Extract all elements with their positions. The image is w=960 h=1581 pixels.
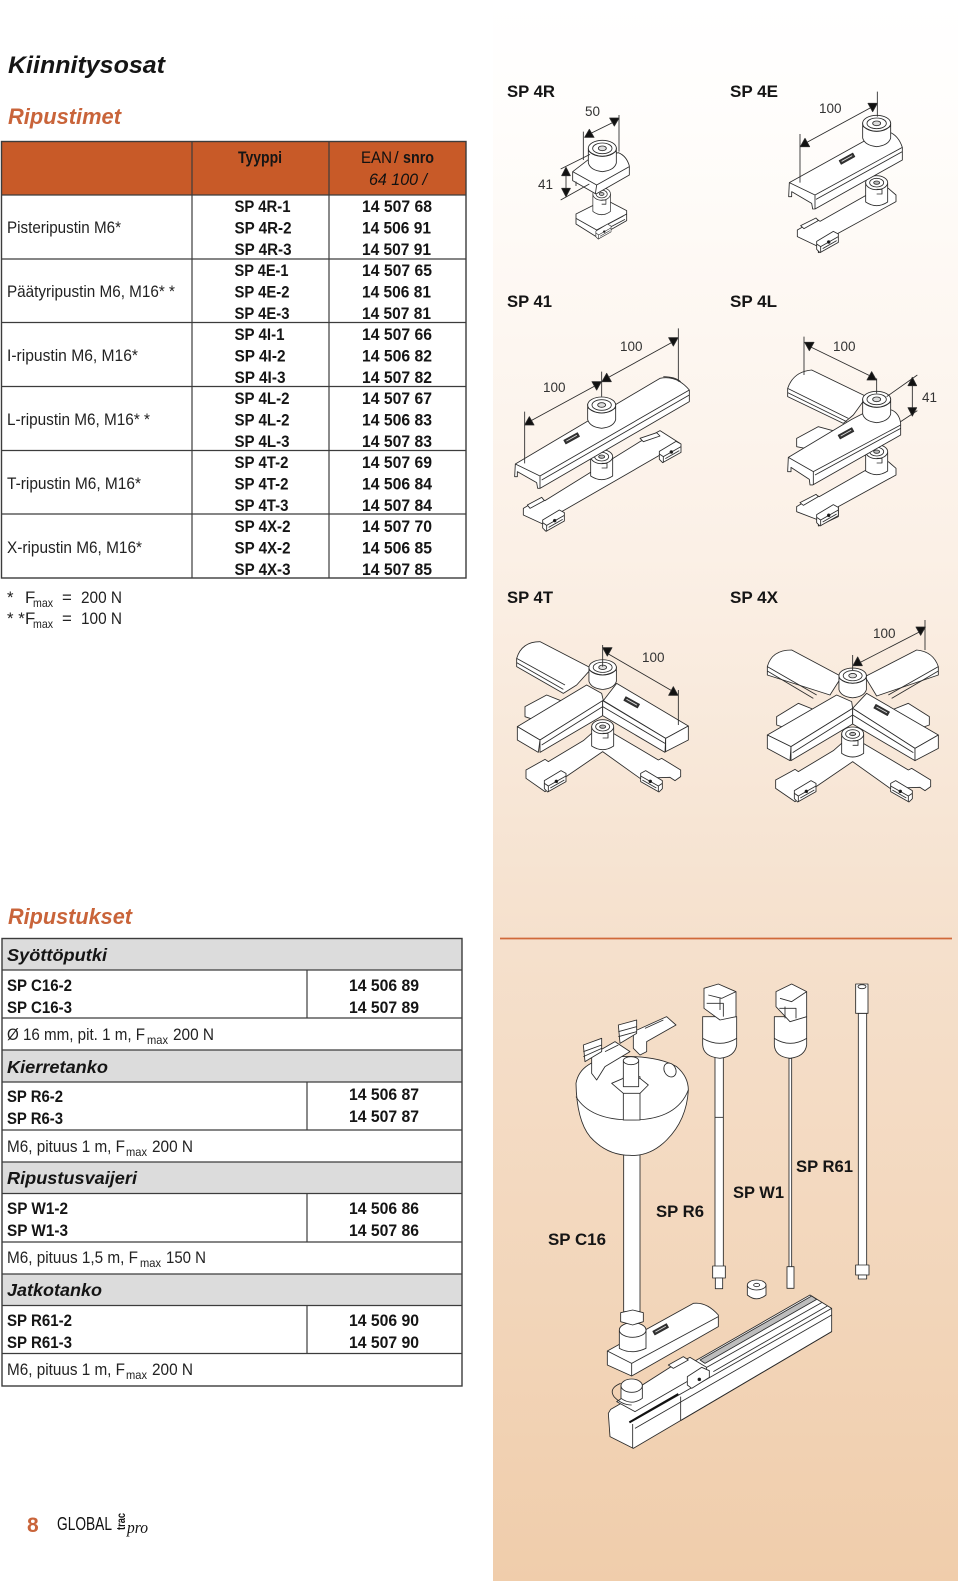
section: Kierretanko: SP R6-3 bbox=[7, 1109, 63, 1128]
row group: T-ripustin: SP 4T-3 bbox=[234, 496, 288, 515]
product labels and dimensions: hangers: 100 bbox=[833, 339, 856, 354]
table header: / bbox=[394, 148, 399, 167]
row group: I-ripustin: SP 4I-3 bbox=[234, 368, 286, 387]
footnotes: 200 N bbox=[81, 588, 122, 607]
product labels and dimensions: hangers: SP 4T bbox=[507, 589, 553, 607]
row group: I-ripustin: 14 507 66 bbox=[362, 325, 432, 344]
row group: Päätyripustin: 14 507 81 bbox=[362, 304, 431, 323]
section: Syöttöputki: 200 N bbox=[173, 1025, 214, 1044]
drawing: suspension parts bbox=[576, 984, 869, 1376]
section: Ripustusvaijeri: SP W1-3 bbox=[7, 1221, 68, 1240]
drawing: SP 4L bbox=[788, 337, 917, 526]
row group: I-ripustin: SP 4I-2 bbox=[234, 346, 286, 366]
section: Jatkotanko: 14 506 90 bbox=[349, 1311, 419, 1330]
footnotes: 100 N bbox=[81, 609, 122, 628]
product labels: suspension parts: SP W1 bbox=[733, 1184, 784, 1202]
product labels and dimensions: hangers: SP 4X bbox=[730, 589, 778, 607]
product labels and dimensions: hangers: 41 bbox=[538, 177, 553, 192]
product labels and dimensions: hangers: 100 bbox=[873, 626, 896, 641]
drawing: SP 4T bbox=[517, 642, 688, 792]
section: Syöttöputki bbox=[7, 945, 419, 1047]
row group: X-ripustin: 14 507 85 bbox=[362, 560, 432, 579]
section: Jatkotanko: M6, pituus 1 m, F bbox=[7, 1360, 125, 1379]
section: Jatkotanko: max bbox=[126, 1368, 147, 1382]
row group: Pisteripustin: SP 4R-1 bbox=[234, 197, 290, 216]
row group: L-ripustin: 14 506 83 bbox=[362, 410, 432, 430]
row group: Päätyripustin bbox=[7, 261, 432, 323]
footnotes: * bbox=[7, 588, 14, 607]
section: Kierretanko bbox=[7, 1057, 419, 1159]
footnotes: = bbox=[62, 609, 72, 628]
product labels and dimensions: hangers: SP 4L bbox=[730, 293, 777, 311]
part: SP R61 extension rod bbox=[856, 984, 869, 1279]
section: Syöttöputki: 14 507 89 bbox=[349, 998, 419, 1017]
product labels and dimensions: hangers: SP 41 bbox=[507, 293, 552, 311]
row group: Pisteripustin: Pisteripustin M6* bbox=[7, 218, 121, 237]
row group: I-ripustin bbox=[7, 325, 432, 387]
drawing: track profile with adapter bbox=[608, 1295, 832, 1448]
table header: Tyyppi bbox=[238, 148, 282, 167]
table header: EAN bbox=[361, 148, 392, 167]
row group: T-ripustin: 14 507 84 bbox=[362, 496, 433, 515]
row group: Pisteripustin: SP 4R-2 bbox=[234, 218, 292, 238]
footnotes: = bbox=[62, 588, 72, 607]
section: Syöttöputki: Ø 16 mm, pit. 1 m, F bbox=[7, 1025, 145, 1044]
row group: I-ripustin: I-ripustin M6, M16* bbox=[7, 346, 138, 365]
row group: T-ripustin: 14 506 84 bbox=[362, 474, 433, 494]
section: Kierretanko: 200 N bbox=[152, 1137, 193, 1156]
section: Syöttöputki: SP C16-2 bbox=[7, 976, 72, 995]
table header bbox=[238, 148, 434, 189]
footnotes: max bbox=[33, 596, 53, 610]
row group: T-ripustin: SP 4T-2 bbox=[234, 474, 288, 494]
row group: Päätyripustin: SP 4E-2 bbox=[234, 282, 290, 302]
footnotes bbox=[7, 588, 122, 631]
row group: Päätyripustin: Päätyripustin M6, M16* * bbox=[7, 282, 175, 301]
row group: X-ripustin: 14 507 70 bbox=[362, 517, 432, 536]
section: Jatkotanko: SP R61-2 bbox=[7, 1311, 72, 1330]
section: Kierretanko: SP R6-2 bbox=[7, 1087, 63, 1106]
product labels: suspension parts: SP R61 bbox=[796, 1158, 853, 1176]
product labels and dimensions: hangers: 100 bbox=[543, 380, 566, 395]
row group: T-ripustin: SP 4T-2 bbox=[234, 453, 288, 472]
section: Jatkotanko: 200 N bbox=[152, 1360, 193, 1379]
section: Syöttöputki: max bbox=[147, 1033, 168, 1047]
product labels: suspension parts: SP R6 bbox=[656, 1203, 704, 1221]
logo: Global trac pro: GLOBAL bbox=[57, 1514, 112, 1534]
row group: Pisteripustin: 14 507 91 bbox=[362, 240, 431, 259]
table: Ripustukset bbox=[2, 938, 462, 1386]
product labels and dimensions: hangers: 41 bbox=[922, 390, 937, 405]
section: Kierretanko: 14 506 87 bbox=[349, 1085, 419, 1104]
row group: Päätyripustin: 14 506 81 bbox=[362, 282, 431, 302]
section: Ripustusvaijeri: max bbox=[140, 1256, 161, 1270]
section: Kierretanko: M6, pituus 1 m, F bbox=[7, 1137, 125, 1156]
row group: I-ripustin: SP 4I-1 bbox=[234, 325, 284, 344]
row group: Päätyripustin: SP 4E-3 bbox=[234, 304, 290, 323]
table header: 64 100 / bbox=[369, 170, 429, 189]
drawing: SP 4R bbox=[561, 115, 629, 239]
row group: Päätyripustin: SP 4E-1 bbox=[234, 261, 288, 280]
product labels: suspension parts: SP C16 bbox=[548, 1231, 606, 1249]
row group: X-ripustin: 14 506 85 bbox=[362, 538, 432, 558]
section: Syöttöputki: 14 506 89 bbox=[349, 976, 419, 995]
table header: snro bbox=[403, 148, 434, 167]
row group: L-ripustin: SP 4L-3 bbox=[234, 432, 290, 451]
logo: Global trac pro: pro bbox=[126, 1518, 148, 1537]
footnotes: F bbox=[25, 588, 35, 607]
drawing: SP 4X bbox=[767, 620, 938, 802]
product labels and dimensions: hangers bbox=[507, 83, 937, 665]
section: Ripustusvaijeri: 14 507 86 bbox=[349, 1221, 419, 1240]
title: Kiinnitysosat bbox=[8, 52, 166, 79]
heading: Ripustimet: Ripustimet bbox=[8, 104, 123, 129]
row group: L-ripustin: SP 4L-2 bbox=[234, 389, 290, 408]
part: small nut bbox=[747, 1280, 766, 1299]
row group: T-ripustin bbox=[7, 453, 433, 515]
section: Kierretanko: 14 507 87 bbox=[349, 1107, 419, 1126]
drawing: SP 4E bbox=[789, 92, 902, 253]
section: Kierretanko: max bbox=[126, 1145, 147, 1159]
row group: Pisteripustin: 14 507 68 bbox=[362, 197, 432, 216]
section: Ripustusvaijeri bbox=[7, 1168, 419, 1270]
section: Jatkotanko: Jatkotanko bbox=[7, 1280, 102, 1300]
section: Jatkotanko: 14 507 90 bbox=[349, 1333, 419, 1352]
row group: X-ripustin: SP 4X-2 bbox=[234, 517, 290, 536]
product labels and dimensions: hangers: 100 bbox=[642, 650, 665, 665]
row group: Päätyripustin: 14 507 65 bbox=[362, 261, 432, 280]
page number: 8 bbox=[27, 1514, 39, 1537]
row group: X-ripustin: SP 4X-2 bbox=[234, 538, 290, 558]
footnotes: max bbox=[33, 617, 53, 631]
background panel bbox=[493, 0, 958, 1581]
footnotes: * * bbox=[7, 609, 25, 628]
illustration group: upper hangers bbox=[515, 92, 917, 531]
section: Ripustusvaijeri: 14 506 86 bbox=[349, 1199, 419, 1218]
illustration group: lower hangers bbox=[517, 620, 938, 802]
divider line bbox=[500, 938, 952, 940]
section: Ripustusvaijeri: Ripustusvaijeri bbox=[7, 1168, 138, 1188]
row group: X-ripustin: SP 4X-3 bbox=[234, 560, 290, 579]
part: adapter bar with tube coupling bbox=[607, 1303, 718, 1376]
footnotes: F bbox=[25, 609, 35, 628]
part: SP C16 tube and canopy bbox=[576, 1017, 688, 1312]
row group: X-ripustin bbox=[7, 517, 432, 579]
part: SP R6 threaded rod bbox=[703, 984, 737, 1289]
product labels and dimensions: hangers: 50 bbox=[585, 104, 600, 119]
section: Kierretanko: Kierretanko bbox=[7, 1057, 108, 1077]
section: Syöttöputki: SP C16-3 bbox=[7, 998, 72, 1017]
heading: Ripustukset: Ripustukset bbox=[8, 904, 134, 929]
row group: I-ripustin: 14 507 82 bbox=[362, 368, 432, 387]
drawing: SP 41 bbox=[515, 328, 689, 531]
row group: Pisteripustin: 14 506 91 bbox=[362, 218, 431, 238]
row group: T-ripustin: T-ripustin M6, M16* bbox=[7, 474, 141, 493]
product labels and dimensions: hangers: 100 bbox=[620, 339, 643, 354]
row group: L-ripustin: L-ripustin M6, M16* * bbox=[7, 410, 150, 429]
row group: Pisteripustin bbox=[7, 197, 432, 259]
section: Ripustusvaijeri: M6, pituus 1,5 m, F bbox=[7, 1248, 138, 1267]
row group: T-ripustin: 14 507 69 bbox=[362, 453, 432, 472]
section: Syöttöputki: Syöttöputki bbox=[7, 945, 108, 965]
row group: L-ripustin: 14 507 67 bbox=[362, 389, 432, 408]
row group: X-ripustin: X-ripustin M6, M16* bbox=[7, 538, 142, 557]
table: Ripustimet bbox=[2, 142, 466, 579]
row group: L-ripustin: SP 4L-2 bbox=[234, 410, 290, 430]
product labels and dimensions: hangers: 100 bbox=[819, 101, 842, 116]
product labels and dimensions: hangers: SP 4R bbox=[507, 83, 555, 101]
section: Jatkotanko bbox=[7, 1280, 419, 1382]
section: Ripustusvaijeri: SP W1-2 bbox=[7, 1199, 68, 1218]
row group: I-ripustin: 14 506 82 bbox=[362, 346, 432, 366]
row group: L-ripustin bbox=[7, 389, 432, 451]
row group: L-ripustin: 14 507 83 bbox=[362, 432, 432, 451]
logo: Global trac pro bbox=[57, 1513, 148, 1537]
section: Ripustusvaijeri: 150 N bbox=[166, 1248, 206, 1267]
logo: Global trac pro: trac bbox=[114, 1513, 128, 1530]
row group: Pisteripustin: SP 4R-3 bbox=[234, 240, 292, 259]
product labels and dimensions: hangers: SP 4E bbox=[730, 83, 778, 101]
product labels: suspension parts bbox=[548, 1158, 853, 1249]
section: Jatkotanko: SP R61-3 bbox=[7, 1333, 72, 1352]
part: SP W1 wire bbox=[774, 984, 807, 1288]
